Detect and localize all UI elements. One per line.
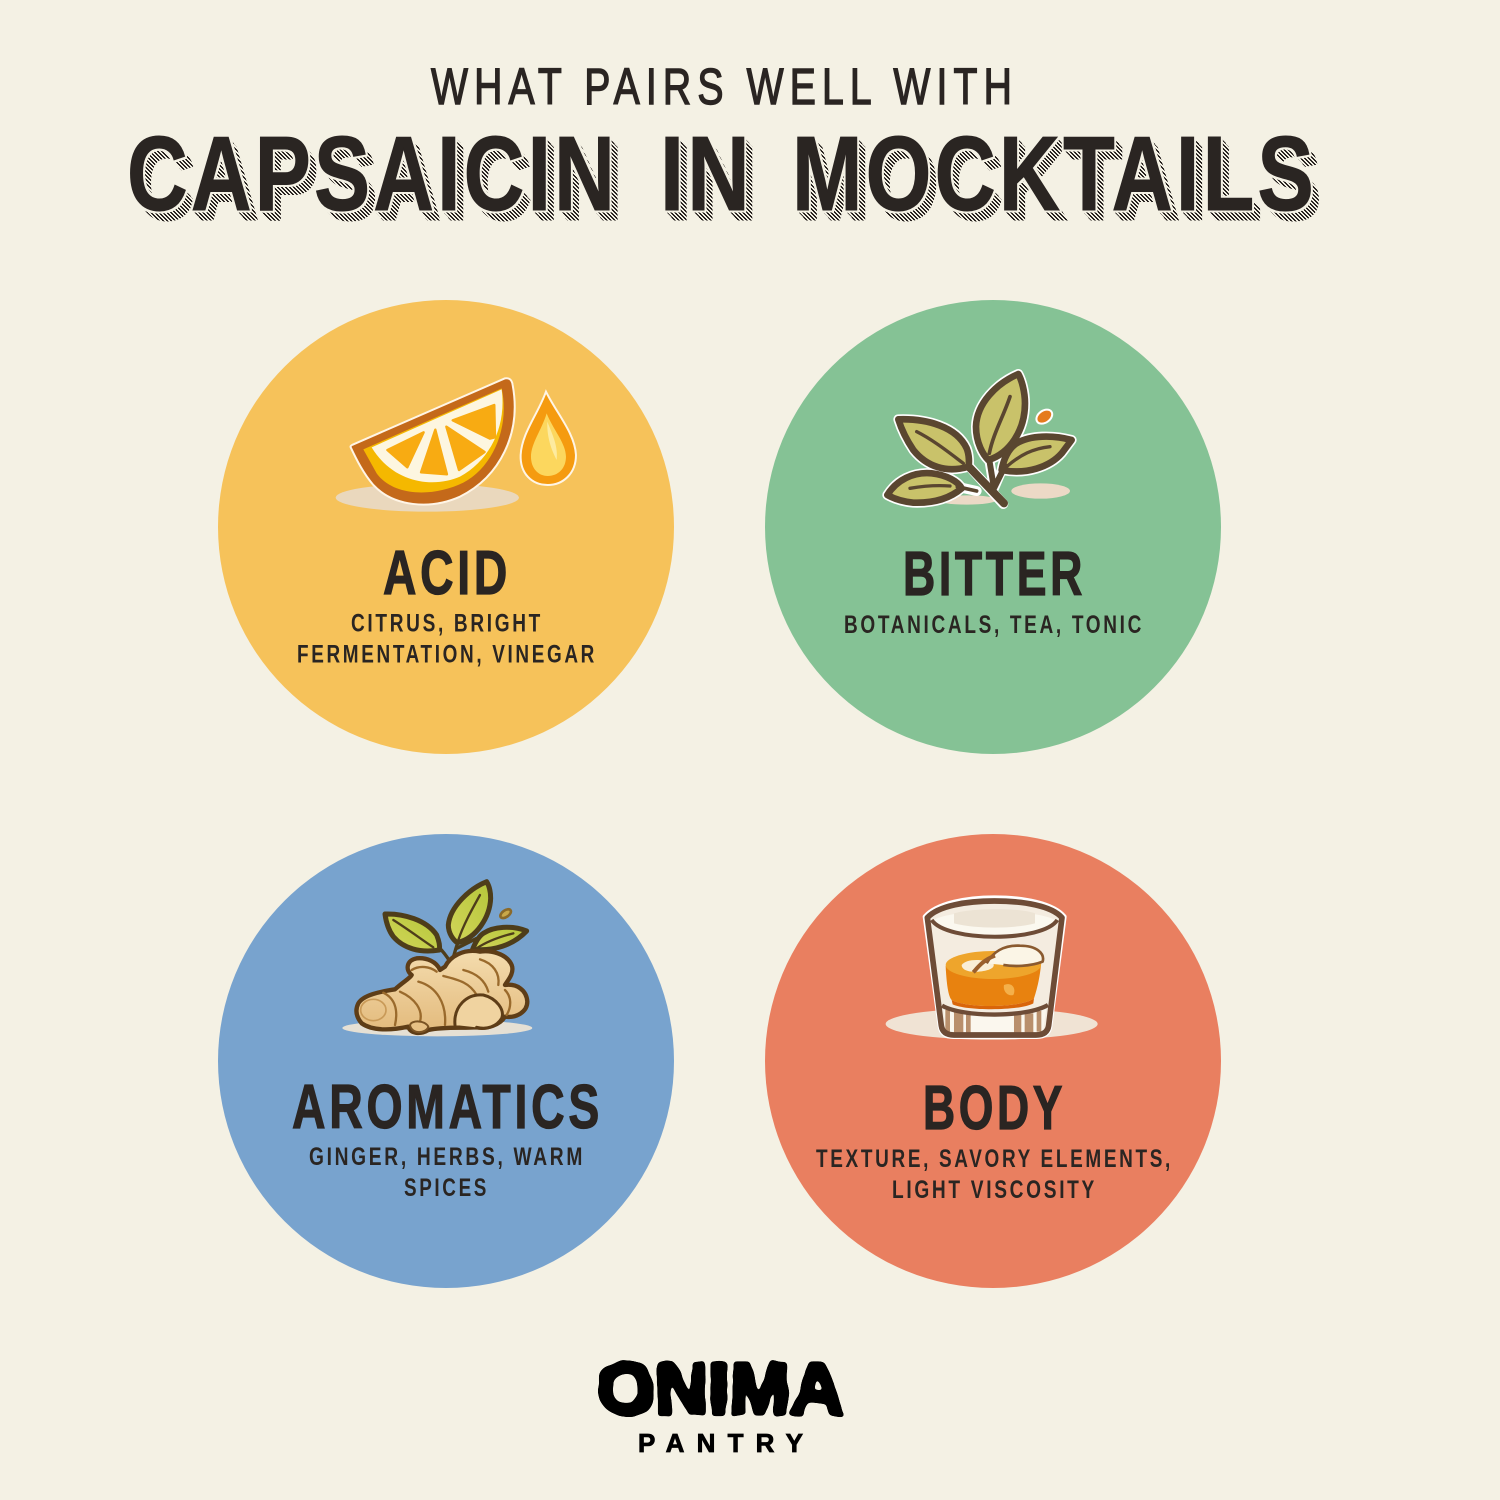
- acid heading: ACID: [383, 539, 511, 608]
- logo sub-wordmark: PANTRY: [638, 1428, 803, 1458]
- aromatics circle: [218, 834, 674, 1288]
- acid circle: [218, 300, 674, 754]
- aromatics description: [309, 1143, 585, 1202]
- panel: bitter: [765, 300, 1221, 754]
- main heading: capsaicin in mocktails: MOCKTAILS: [792, 115, 1317, 233]
- aromatics description: SPICES: [404, 1174, 489, 1202]
- panel: acid: [218, 300, 674, 754]
- main heading: capsaicin in mocktails: IN: [660, 115, 753, 233]
- body description: LIGHT VISCOSITY: [892, 1176, 1097, 1204]
- aromatics description: GINGER, HERBS, WARM: [309, 1143, 585, 1171]
- bitter description: BOTANICALS, TEA, TONIC: [844, 611, 1144, 639]
- icon: ginger root with leaves: [342, 882, 532, 1036]
- body circle: [765, 834, 1221, 1288]
- title: [127, 58, 1317, 233]
- body heading: BODY: [923, 1074, 1066, 1143]
- icon: whiskey glass with ice: [886, 898, 1098, 1040]
- acid description: FERMENTATION, VINEGAR: [297, 640, 597, 668]
- bitter circle: [765, 300, 1221, 754]
- main heading: capsaicin in mocktails: [127, 115, 1317, 233]
- bitter heading: BITTER: [903, 540, 1086, 609]
- main heading: capsaicin in mocktails: CAPSAICIN: [127, 115, 618, 233]
- panel: aromatics: [218, 834, 674, 1288]
- acid description: [297, 610, 597, 668]
- logo wordmark: ONIMA: [597, 1349, 844, 1430]
- body description: [816, 1145, 1173, 1204]
- acid description: CITRUS, BRIGHT: [351, 610, 543, 638]
- panel: body: [765, 834, 1221, 1288]
- aromatics heading: AROMATICS: [292, 1073, 603, 1142]
- body description: TEXTURE, SAVORY ELEMENTS,: [816, 1145, 1173, 1173]
- logo: onima pantry: [597, 1349, 844, 1458]
- subtitle: what pairs well with: WHAT PAIRS WELL WITH: [431, 58, 1018, 115]
- icon: botanical leaves: [887, 374, 1072, 505]
- icon: orange slice and drop: [336, 378, 576, 512]
